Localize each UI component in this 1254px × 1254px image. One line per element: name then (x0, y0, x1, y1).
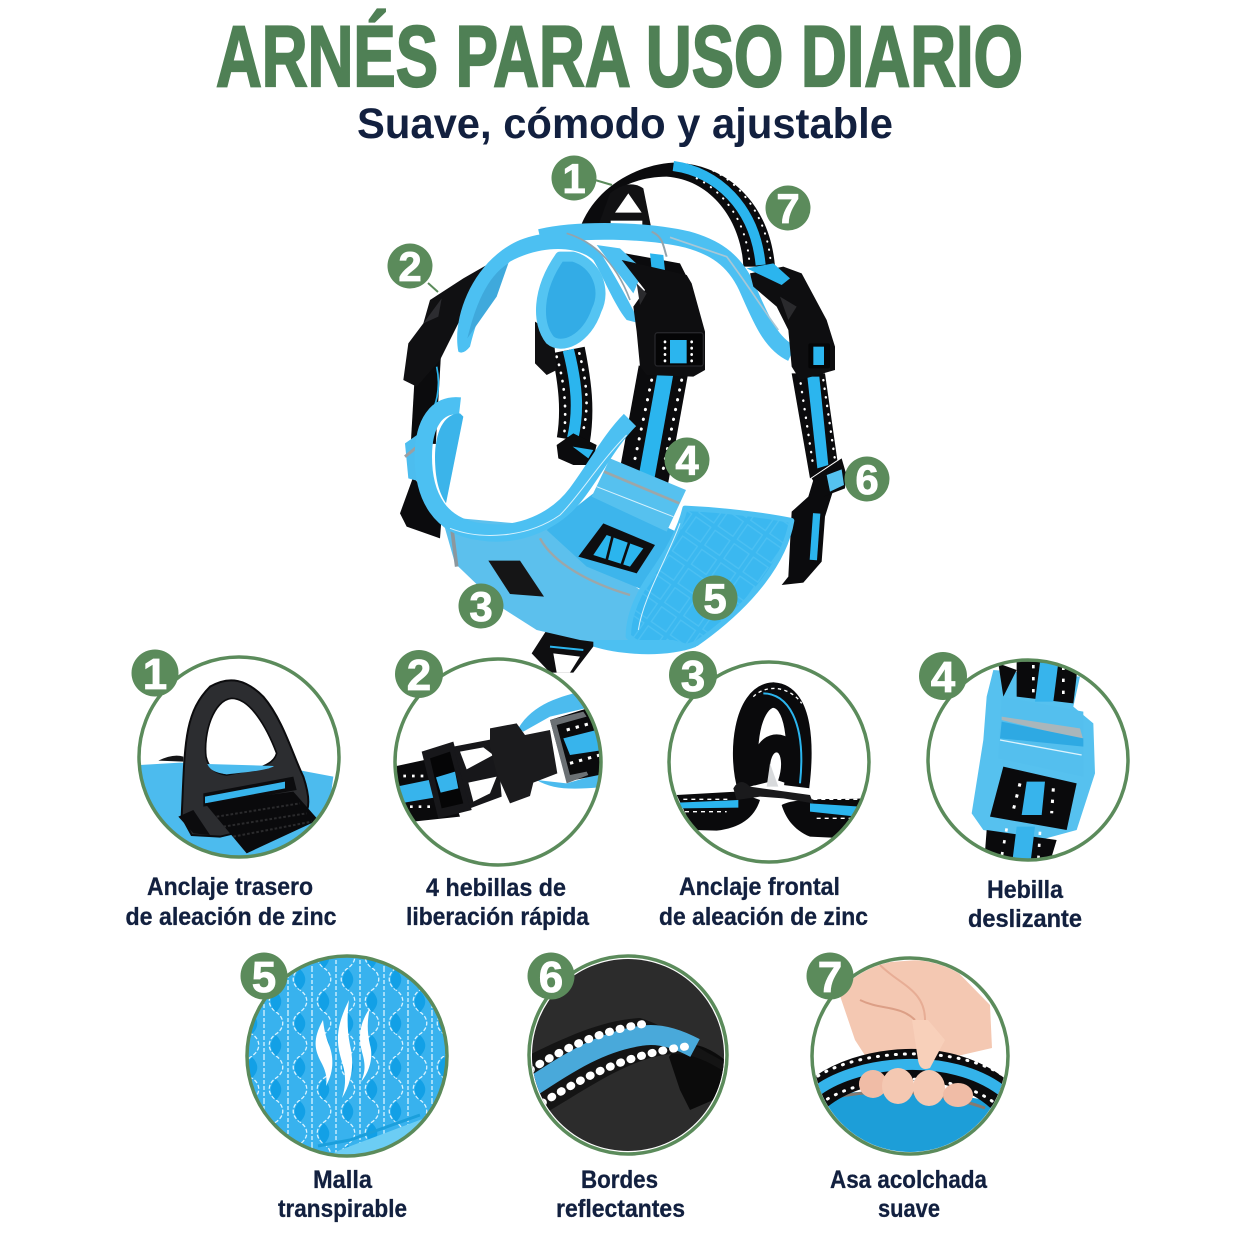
circle outline 2 (395, 659, 601, 865)
back-left strap (535, 322, 597, 465)
detail image: reflective band (532, 959, 724, 1151)
main harness illustration (400, 163, 846, 673)
caption 7: suave (878, 1195, 940, 1223)
detail image: zinc ring (140, 680, 333, 863)
badge 2: 2 (407, 651, 431, 700)
black patch (488, 561, 544, 597)
chest plate (442, 517, 640, 647)
badge 6 on harness: 6 (855, 456, 879, 503)
slider band (592, 458, 686, 532)
caption 6: reflectantes (556, 1195, 685, 1223)
badge 4 on harness: 4 (675, 437, 699, 484)
badge 1 on harness: 1 (562, 155, 586, 202)
caption 1: Anclaje trasero (147, 873, 313, 901)
caption 6: Bordes (581, 1166, 658, 1194)
mesh panel (593, 508, 792, 654)
top neck band (457, 231, 792, 353)
inner shoulder pad (541, 257, 601, 344)
badge 2 (395, 650, 443, 700)
panel: 7 padded handle (810, 958, 1010, 1160)
slide buckle (578, 523, 655, 573)
badge 2 on harness (388, 243, 432, 290)
circle outline 7 (812, 958, 1008, 1154)
badge 3 (669, 651, 717, 701)
caption 3: Anclaje frontal (679, 873, 840, 901)
caption 4: deslizante (968, 905, 1082, 933)
caption 3 (659, 873, 868, 931)
circle outline 5 (247, 956, 447, 1156)
panel: 4 sliding buckle (928, 660, 1128, 873)
caption 2 (406, 874, 590, 931)
lower neck band (423, 406, 630, 535)
panel: 6 reflective edges (525, 950, 730, 1160)
badge 3: 3 (681, 652, 705, 701)
badge 5 on harness (692, 575, 738, 622)
leader line badge 2 (428, 283, 438, 292)
circle outline 1 (139, 657, 339, 857)
caption 6 (556, 1166, 685, 1223)
badge 3 on harness (458, 583, 504, 630)
circle outline 3 (669, 662, 869, 862)
handle (580, 163, 775, 267)
leader line badge 1 (595, 180, 612, 185)
caption 1 (126, 873, 337, 931)
caption 5: transpirable (278, 1195, 407, 1223)
inner chest opening (547, 493, 680, 590)
caption 4: Hebilla (987, 876, 1064, 904)
badge 6 on harness (844, 456, 890, 503)
panel: 3 front anchor (669, 662, 869, 862)
caption 5: Malla (313, 1166, 373, 1194)
badge 6: 6 (539, 953, 563, 1002)
badge 7: 7 (818, 953, 842, 1002)
badge 4 (919, 652, 967, 702)
panel: 2 quick-release buckle (393, 659, 607, 865)
badge 1 (132, 650, 178, 699)
caption 3: de aleación de zinc (659, 903, 868, 931)
detail image: slider (972, 662, 1095, 873)
center strap (607, 250, 690, 480)
badge 7 on harness (766, 185, 810, 232)
caption 2: 4 hebillas de (426, 874, 566, 902)
right strap (782, 373, 846, 585)
badge 3 on harness: 3 (469, 583, 493, 630)
badge 4: 4 (931, 653, 956, 702)
panel: 1 rear anchor (139, 657, 339, 863)
subtitle: Suave, cómodo y ajustable (357, 100, 893, 148)
badge 4 on harness (664, 437, 710, 484)
caption 5 (278, 1166, 407, 1223)
badge 7 (806, 952, 854, 1002)
upper-center buckle (622, 260, 705, 377)
badge 7 on harness: 7 (776, 185, 800, 232)
caption 4 (968, 876, 1082, 933)
far-left strap and buckle (400, 265, 487, 538)
airflow waves (316, 1000, 371, 1098)
panel: 5 breathable mesh (240, 950, 455, 1165)
caption 7 (830, 1166, 988, 1223)
caption 1: de aleación de zinc (126, 903, 337, 931)
badge 6 (528, 952, 574, 1002)
badge 2 on harness: 2 (398, 243, 422, 290)
badge 5 (240, 952, 288, 1002)
badge 1: 1 (143, 650, 167, 699)
badge 5: 5 (252, 953, 276, 1002)
detail image: buckle (393, 690, 607, 823)
circle outline 4 (928, 660, 1128, 860)
caption 7: Asa acolchada (830, 1166, 988, 1194)
badge 1 on harness (552, 155, 596, 202)
detail image: hand on handle (816, 960, 1004, 1152)
lower front D-ring (532, 630, 598, 673)
badge 5 on harness: 5 (703, 575, 727, 622)
upper-right buckle (747, 263, 835, 380)
circle outline 6 (529, 956, 727, 1154)
detail image: strap loop (677, 688, 863, 838)
detail image: mesh (248, 958, 446, 1154)
rear D-ring (597, 184, 652, 230)
caption 2: liberación rápida (406, 903, 590, 931)
